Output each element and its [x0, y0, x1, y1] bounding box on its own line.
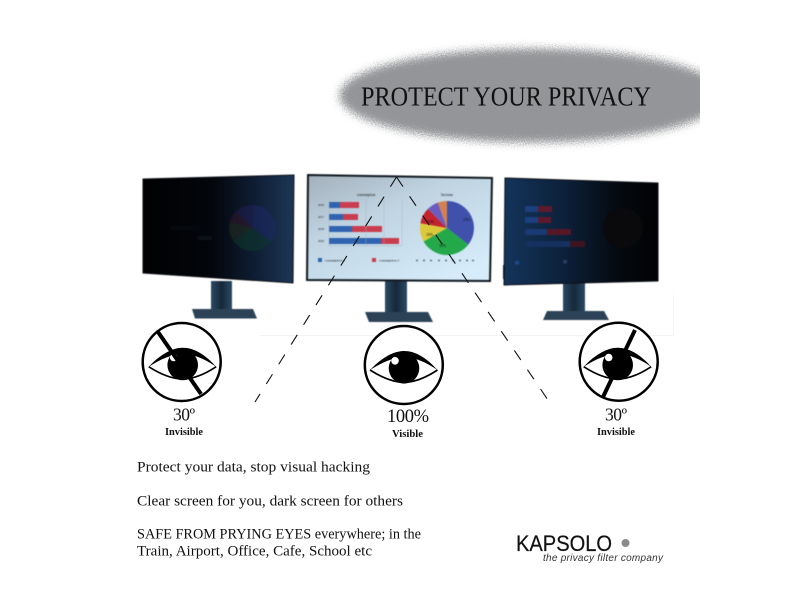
- bar chart: 2018: [318, 227, 324, 231]
- bar chart: 2019: [318, 203, 324, 207]
- grey oval: [340, 48, 724, 142]
- left stand: [211, 281, 232, 311]
- centre screen: [307, 175, 492, 281]
- label: centre angle: Visible: [392, 429, 424, 440]
- right dim bar chart: [515, 206, 585, 264]
- title: PROTECT YOUR PRIVACY: [361, 82, 651, 112]
- text block: benefits: [137, 460, 421, 560]
- centre base: [365, 312, 433, 322]
- chart legend: [318, 258, 474, 262]
- text block: benefits: Clear screen for you, dark screen for others: [137, 494, 403, 510]
- faint image frame: [260, 295, 674, 336]
- left screen: [143, 175, 294, 283]
- left base: [192, 309, 257, 318]
- centre stand: [385, 281, 407, 314]
- right base: [543, 311, 609, 320]
- label: left angle: Invisible: [165, 427, 204, 438]
- monitor: right, dark screen: [503, 178, 658, 320]
- pie chart: 10%: [426, 232, 434, 237]
- right side button: [503, 265, 505, 279]
- text block: benefits: SAFE FROM PRYING EYES everywhere; in the: [137, 526, 421, 542]
- label: right angle: 30º: [605, 404, 628, 424]
- text block: benefits: Train, Airport, Office, Cafe, School etc: [137, 544, 372, 560]
- pie chart: [420, 193, 474, 255]
- pie chart: Increase: [441, 193, 453, 197]
- right dim pie chart: [603, 208, 643, 248]
- logo: Kapsolo: [516, 531, 664, 564]
- bar chart: 2017: [318, 215, 324, 219]
- monitor: left, dark screen: [143, 175, 294, 318]
- monitor: centre, clear screen: [307, 175, 492, 322]
- label: centre angle: [387, 407, 429, 440]
- chart legend: consumption 1: [325, 258, 345, 262]
- chart title: consumption: [357, 193, 375, 197]
- text block: benefits: Protect your data, stop visual hacking: [137, 460, 370, 476]
- right screen: [504, 178, 658, 285]
- bar chart: 2020: [318, 239, 324, 243]
- pie chart: 10%: [427, 219, 435, 224]
- right stand: [563, 283, 585, 313]
- dashed viewing angle lines: [255, 177, 548, 402]
- title banner: [340, 48, 724, 142]
- pie chart: 35%: [463, 217, 471, 222]
- pie chart: 30%: [439, 243, 447, 248]
- icon: eye, centre: [365, 326, 443, 404]
- left dim pie chart: [198, 205, 276, 251]
- label: left angle: [165, 404, 204, 438]
- icon: crossed-out eye, right: [580, 323, 658, 401]
- logo: Kapsolo: KAPSOLO: [516, 531, 612, 556]
- label: right angle: Invisible: [597, 427, 636, 438]
- icon: crossed-out eye, left: [143, 323, 221, 401]
- logo: Kapsolo: the privacy filter company: [543, 553, 664, 564]
- chart legend: consumption 2: [379, 258, 399, 262]
- bar chart: [318, 193, 402, 246]
- label: centre angle: 100%: [387, 407, 429, 427]
- label: left angle: 30º: [173, 404, 196, 424]
- label: right angle: [597, 404, 636, 438]
